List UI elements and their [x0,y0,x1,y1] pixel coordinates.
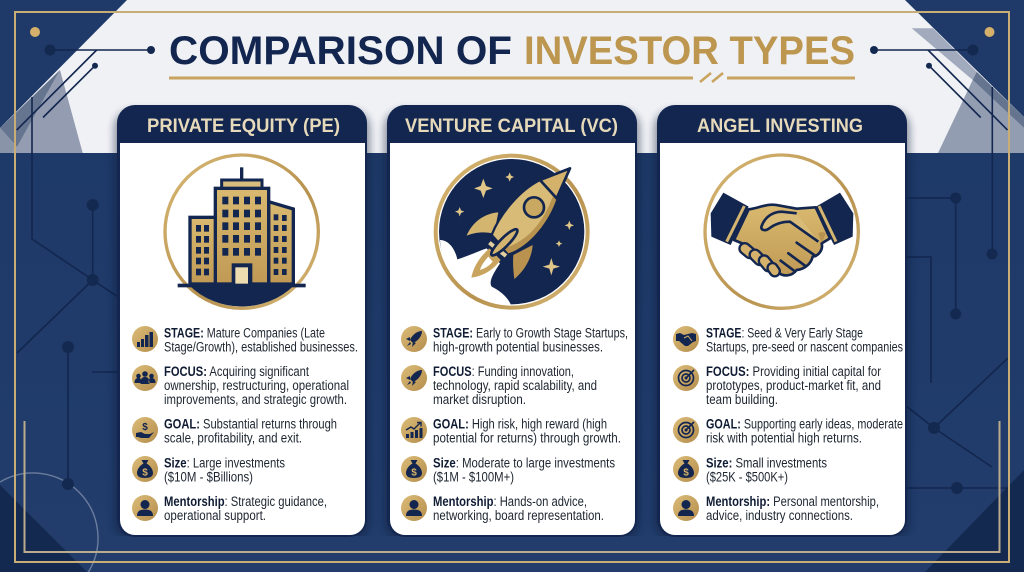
mentorship row: advice, industry connections. [706,508,853,523]
goal row: GOAL: High risk, high reward (high [433,417,607,432]
focus row: improvements, and strategic growth. [164,392,347,407]
goal row: GOAL: Supporting early ideas, moderate [706,417,903,432]
goal row [132,417,337,446]
circuit lines right [870,27,1008,494]
size row [401,455,615,484]
title underline [169,73,855,82]
size row: Size: Small investments [706,455,827,470]
icon: money bag: $ [142,468,148,478]
icon: mentor [401,495,427,521]
icon: people [132,365,158,391]
icon: rocket [436,156,588,308]
title: COMPARISON OF [169,29,512,73]
icon: money bag [132,456,158,482]
focus row: FOCUS: Funding innovation, [433,364,574,379]
icon: mentor [132,495,158,521]
icon: office buildings [165,155,318,308]
icon: money bag: $ [683,468,689,478]
size row: ($25K - $500K+) [706,469,788,484]
focus row: FOCUS: Providing initial capital for [706,364,881,379]
stage row: Stage/Growth), established businesses. [164,339,358,354]
mentorship row: Mentorship: Hands-on advice, [433,494,587,509]
circuit lines left [0,27,155,572]
goal row: scale, profitability, and exit. [164,431,302,446]
title [169,29,855,73]
panel: angel investing [654,105,910,540]
size row [673,455,827,484]
mentorship row: Mentorship: Personal mentorship, [706,494,879,509]
icon: rocket [401,326,427,352]
focus row: market disruption. [433,392,526,407]
focus row [132,364,349,407]
stage row [401,325,628,354]
focus row: team building. [706,392,778,407]
stage row [673,325,903,354]
icon: money bag: $ [411,468,417,478]
title: INVESTOR TYPES [524,29,855,73]
focus row: FOCUS: Acquiring significant [164,364,309,379]
stage row: Startups, pre-seed or nascent companies [706,339,903,354]
icon: hand with dollar [132,417,158,443]
focus row: ownership, restructuring, operational [164,378,349,393]
icon: money bag [401,456,427,482]
mentorship row: Mentorship: Strategic guidance, [164,494,327,509]
focus row: technology, rapid scalability, and [433,378,597,393]
size row: ($10M - $Billions) [164,469,253,484]
focus row [673,364,881,407]
mentorship row [673,494,879,523]
heading: angel investing: ANGEL INVESTING [697,116,863,137]
icon: target [673,417,699,443]
icon: handshake [705,155,858,308]
size row: Size: Moderate to large investments [433,455,615,470]
icon: target [673,365,699,391]
mentorship row: networking, board representation. [433,508,604,523]
stage row: STAGE: Mature Companies (Late [164,325,325,340]
goal row [673,417,903,446]
stage row: STAGE: Early to Growth Stage Startups, [433,325,628,340]
icon: mentor [673,495,699,521]
mentorship row [401,494,604,523]
stage row: STAGE: Seed & Very Early Stage [706,325,863,340]
icon: rocket [401,365,427,391]
panel: venture capital [384,105,640,540]
goal row: risk with potential high returns. [706,431,862,446]
icon: growth chart [401,417,427,443]
icon: handshake [673,326,699,352]
size row: Size: Large investments [164,455,285,470]
goal row: potential for returns) through growth. [433,431,621,446]
goal row [401,417,621,446]
stage row: high-growth potential businesses. [433,339,603,354]
heading: private equity: PRIVATE EQUITY (PE) [147,116,340,137]
stage row [132,325,358,354]
mentorship row [132,494,327,523]
size row: ($1M - $100M+) [433,469,514,484]
panel: private equity [114,105,370,540]
icon: money bag [673,456,699,482]
icon: bars [132,326,158,352]
focus row [401,364,597,407]
goal row: GOAL: Substantial returns through [164,417,337,432]
heading: venture capital: VENTURE CAPITAL (VC) [405,116,618,137]
icon: hand with dollar: $ [142,422,148,433]
size row [132,455,285,484]
mentorship row: operational support. [164,508,266,523]
focus row: prototypes, product-market fit, and [706,378,881,393]
